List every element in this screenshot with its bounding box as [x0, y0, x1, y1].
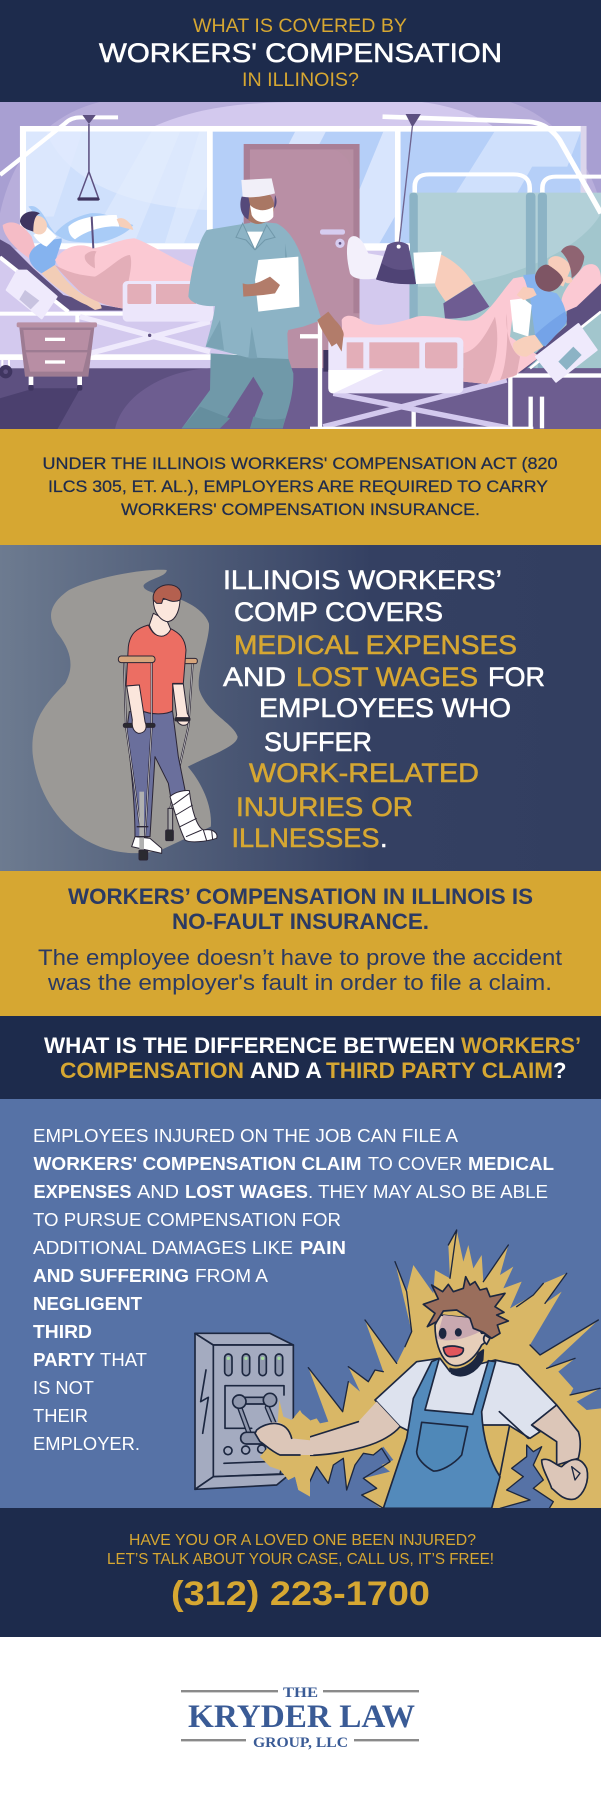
window: [20, 126, 586, 249]
floor: [0, 354, 601, 429]
text: third party explanation: EXPENSES: [34, 1182, 132, 1202]
curtains: [360, 172, 601, 368]
door handle: [320, 229, 345, 248]
left bed frame: [0, 312, 213, 378]
heading: in illinois: IN ILLINOIS?: [242, 69, 359, 91]
text: coverage statement: SUFFER: [264, 727, 372, 757]
text: coverage statement: LOST WAGES: [296, 662, 478, 692]
heading: difference question: ?: [553, 1058, 566, 1083]
text: third party explanation: ADDITIONAL DAMAGES LIKE: [33, 1238, 293, 1258]
text: coverage statement: FOR: [488, 662, 545, 692]
text: third party explanation: EMPLOYER.: [33, 1434, 140, 1454]
left bed rail: [123, 281, 213, 322]
ward background: [0, 102, 601, 429]
illustration: electrocuted worker: [195, 1230, 601, 1510]
heading: difference question: WHAT IS THE DIFFERENCE BETWEEN: [44, 1033, 455, 1058]
nightstand: [17, 322, 97, 391]
text: third party explanation: . THEY MAY ALSO BE ABLE: [308, 1182, 548, 1202]
illustration: man on crutches: [118, 585, 217, 860]
text: third party explanation: PAIN: [300, 1238, 346, 1258]
text: coverage statement: .: [380, 823, 388, 853]
illustration: grey blob: [32, 570, 238, 853]
heading: difference question: WORKERS’: [461, 1033, 581, 1058]
text: coverage statement: WORK-RELATED: [249, 758, 479, 788]
text: coverage statement: MEDICAL EXPENSES: [234, 630, 517, 660]
text: third party explanation: WORKERS' COMPENSATION CLAIM: [34, 1154, 362, 1174]
text: call to action: [107, 1532, 494, 1568]
overhead rails and trapeze: [0, 114, 601, 213]
text: third party explanation: NEGLIGENT: [33, 1294, 142, 1314]
logo: the kryder law group: THE: [283, 1685, 318, 1701]
text: coverage statement: AND: [223, 662, 286, 692]
text: coverage statement: ILLNESSES: [232, 823, 380, 853]
text: third party explanation: THEIR: [33, 1406, 88, 1426]
text: coverage statement: [223, 565, 545, 853]
heading: no-fault: [68, 884, 533, 934]
electrical box: [195, 1333, 313, 1497]
illustration: hospital ward: [0, 102, 601, 430]
right patient: [342, 127, 601, 384]
text: third party explanation: AND: [137, 1182, 179, 1202]
heading: difference question: [44, 1033, 581, 1083]
left patient: [0, 206, 200, 318]
right bed frame: [300, 320, 601, 430]
text: third party explanation: LOST WAGES: [185, 1182, 308, 1202]
text: coverage statement: ILLINOIS WORKERS’: [223, 565, 502, 595]
text: call to action: LET’S TALK ABOUT YOUR CASE, CALL US, IT’S FREE!: [107, 1551, 494, 1568]
heading: what is covered by: WHAT IS COVERED BY: [193, 15, 407, 37]
text: third party explanation: EMPLOYEES INJURED ON THE JOB CAN FILE A: [33, 1126, 458, 1146]
doctor's hand: [317, 312, 344, 352]
text: act statement: ILCS 305, ET. AL.), EMPLOYERS ARE REQUIRED TO CARRY: [48, 477, 548, 496]
text: third party explanation: MEDICAL: [468, 1154, 554, 1174]
heading: difference question: THIRD PARTY CLAIM: [326, 1058, 553, 1083]
text: third party explanation: AND SUFFERING: [33, 1266, 189, 1286]
doctor: [182, 178, 322, 428]
text: third party explanation: PARTY: [33, 1350, 95, 1370]
panel: coverage: [0, 545, 601, 871]
panel: difference question: [0, 1016, 601, 1099]
text: no-fault explanation: The employee doesn’t have to prove the accident: [38, 945, 563, 970]
text: third party explanation: [33, 1126, 554, 1454]
text: act statement: [42, 454, 558, 519]
heading: difference question: AND A: [250, 1058, 322, 1083]
text: act statement: WORKERS' COMPENSATION INSURANCE.: [121, 500, 480, 519]
right bed rail: [328, 337, 463, 393]
logo: the kryder law group: [181, 1685, 419, 1751]
text: coverage statement: INJURIES OR: [236, 792, 413, 822]
panel: third party claim: [0, 1099, 601, 1510]
text: third party explanation: THAT: [100, 1350, 147, 1370]
phone number: (312) 223-1700: [171, 1575, 430, 1613]
right side of ward: [300, 127, 601, 430]
panel: act statement: [0, 429, 601, 545]
text: coverage statement: COMP COVERS: [234, 597, 443, 627]
heading: workers' compensation: WORKERS' COMPENSATION: [99, 38, 502, 68]
text: third party explanation: FROM A: [195, 1266, 268, 1286]
text: third party explanation: IS NOT: [33, 1378, 94, 1398]
panel: header: [0, 0, 601, 102]
text: call to action: HAVE YOU OR A LOVED ONE BEEN INJURED?: [129, 1532, 476, 1549]
heading: no-fault: WORKERS’ COMPENSATION IN ILLINOIS IS: [68, 884, 533, 909]
door: [244, 144, 360, 369]
text: third party explanation: TO PURSUE COMPENSATION FOR: [33, 1210, 341, 1230]
text: no-fault explanation: was the employer's fault in order to file a claim.: [47, 970, 552, 995]
panel: no-fault insurance: [0, 871, 601, 1016]
text: act statement: UNDER THE ILLINOIS WORKERS' COMPENSATION ACT (820: [42, 454, 558, 473]
left side of ward: [0, 178, 322, 428]
heading: no-fault: NO-FAULT INSURANCE.: [172, 909, 429, 934]
logo: the kryder law group: GROUP, LLC: [253, 1735, 348, 1751]
text: coverage statement: EMPLOYEES WHO: [259, 693, 511, 723]
logo: the kryder law group: KRYDER LAW: [188, 1699, 415, 1735]
text: third party explanation: THIRD: [33, 1322, 92, 1342]
text: no-fault explanation: [38, 945, 563, 995]
text: third party explanation: TO COVER: [368, 1154, 462, 1174]
heading: difference question: COMPENSATION: [60, 1058, 244, 1083]
worker and sparks: [260, 1230, 601, 1510]
panel: call to action: [0, 1508, 601, 1637]
